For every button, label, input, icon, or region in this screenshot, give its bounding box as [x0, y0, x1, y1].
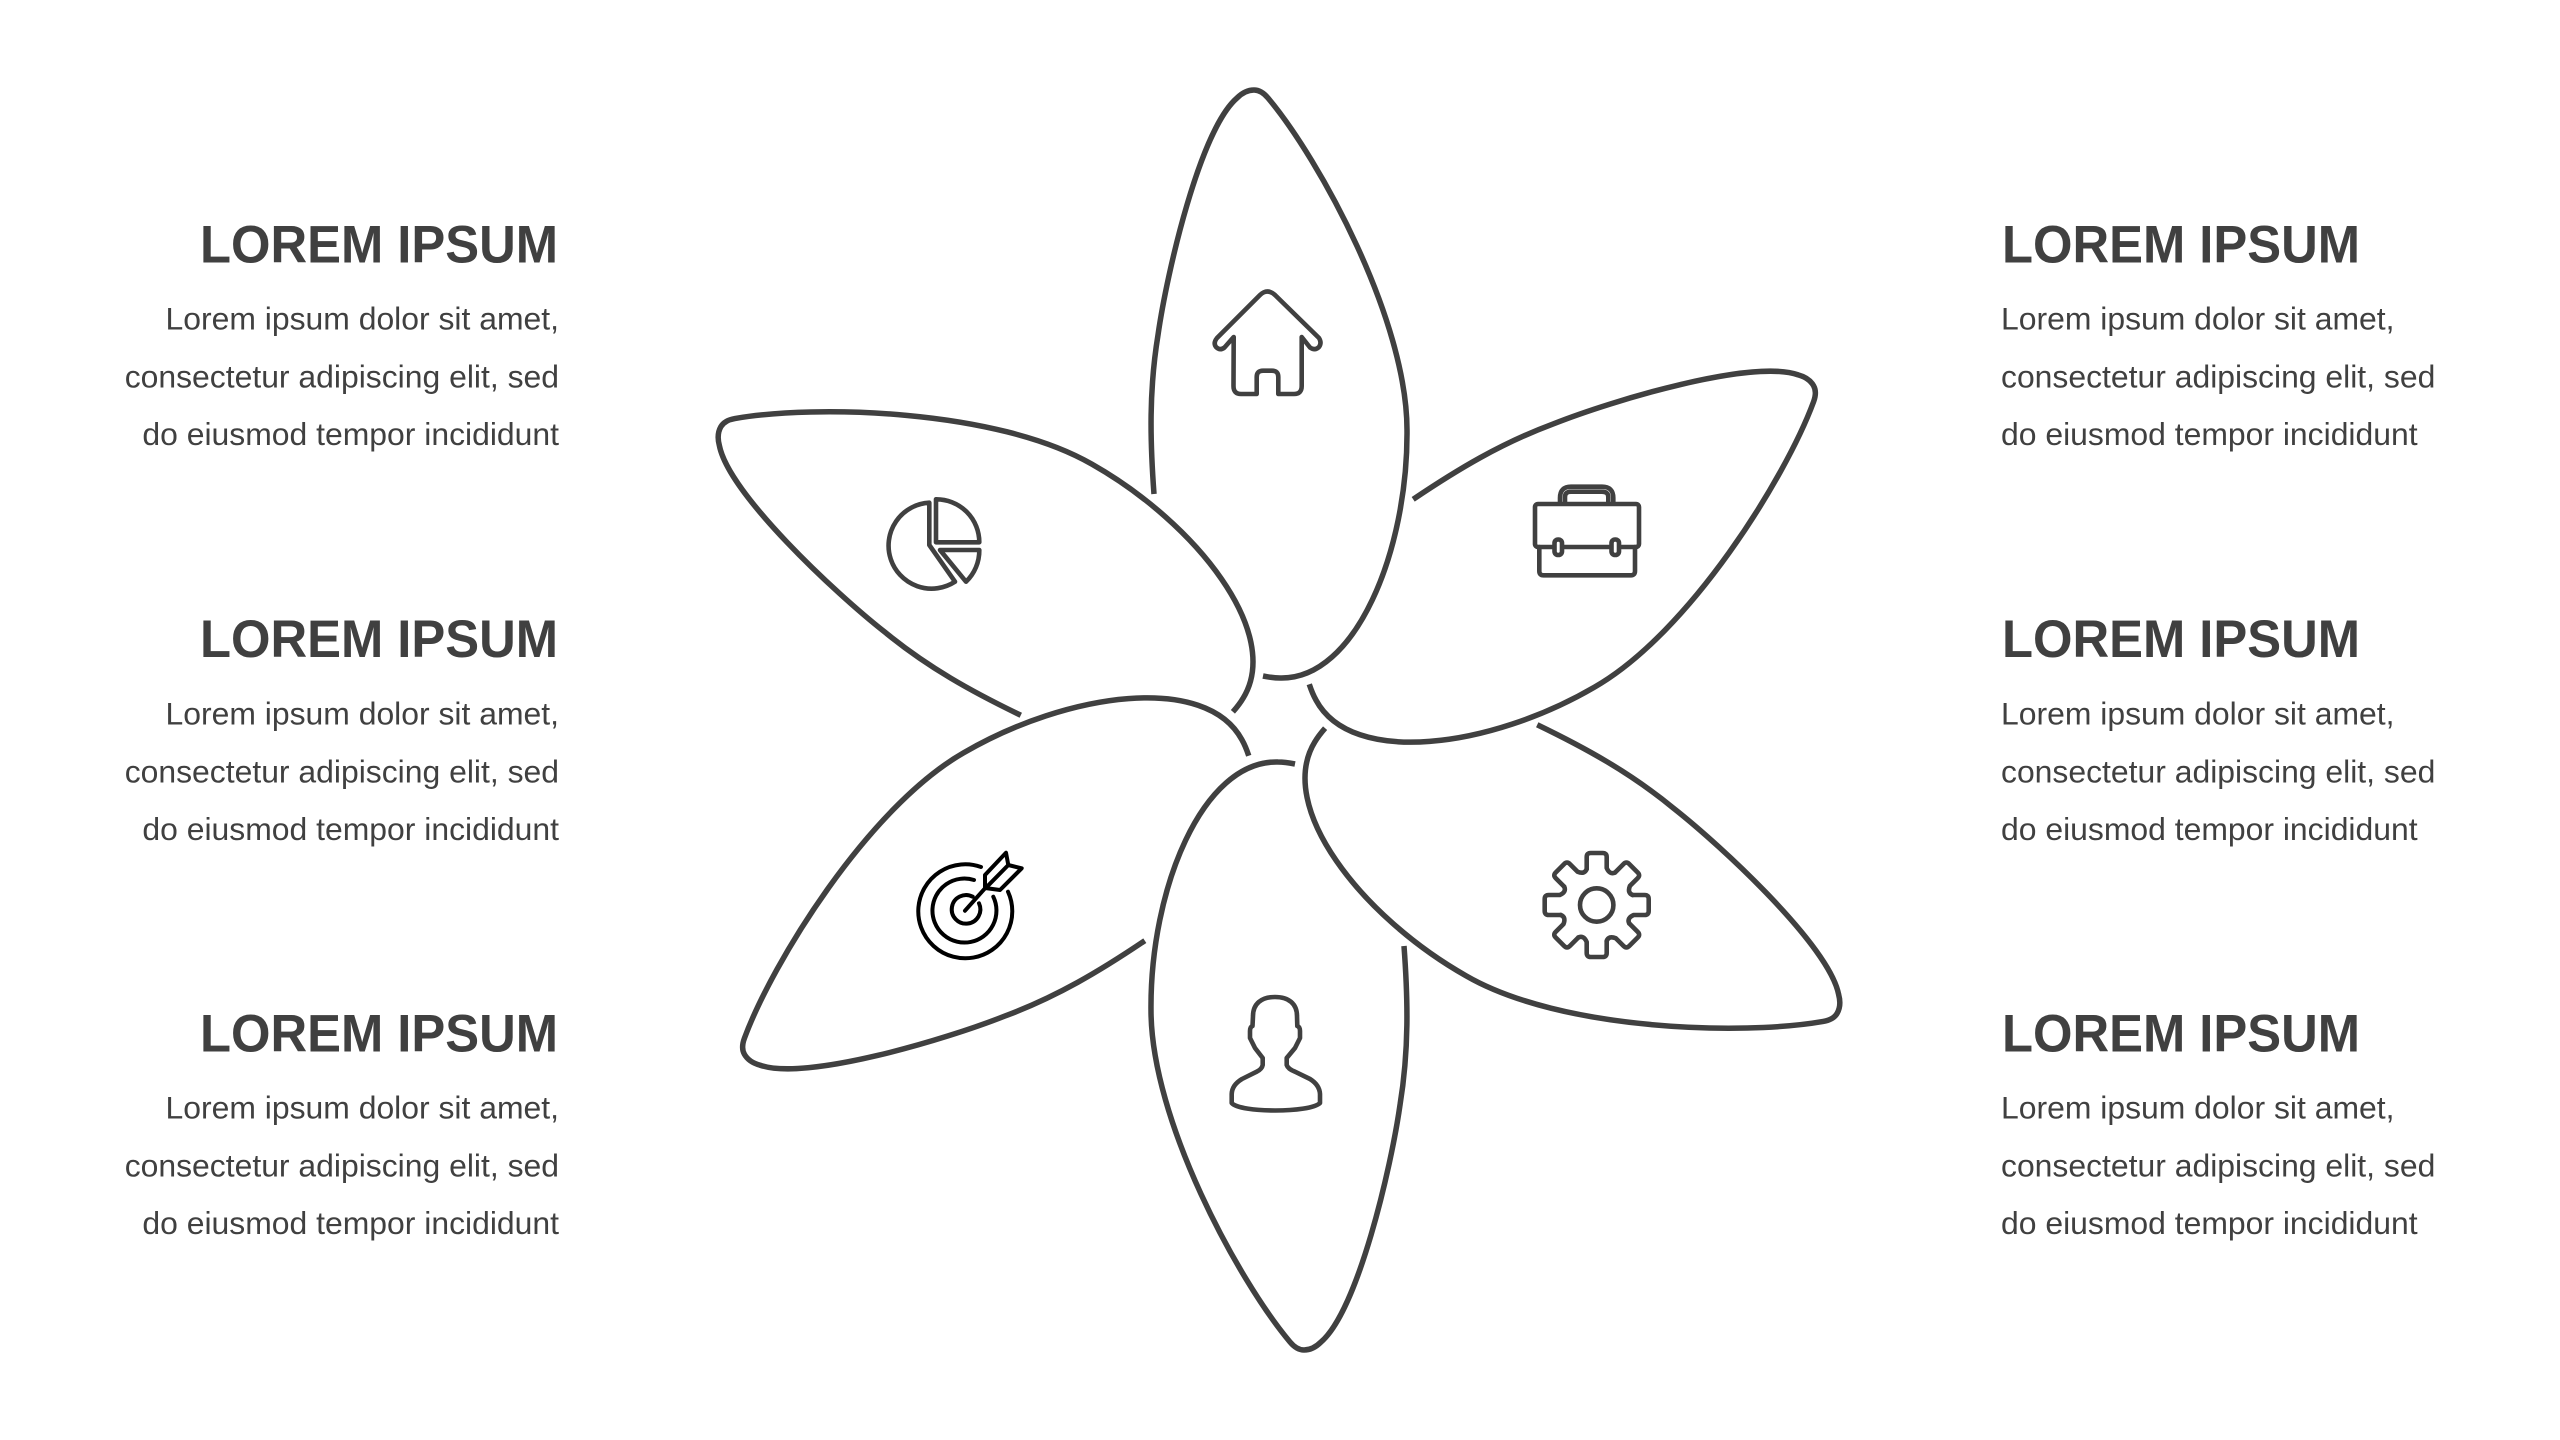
icon: person	[1232, 997, 1320, 1110]
icon: pie chart	[889, 499, 979, 589]
text block: left 3	[125, 1004, 559, 1241]
flower diagram	[669, 90, 1889, 1350]
petal: upper left	[669, 294, 1307, 810]
icon: gear	[1545, 853, 1649, 957]
petal: top	[1151, 90, 1407, 678]
text block: right 3: Lorem ipsum dolor sit amet,	[2001, 1090, 2394, 1126]
text block: right 2: do eiusmod tempor incididunt	[2001, 811, 2418, 847]
petal: lower right	[1251, 630, 1889, 1146]
icon: briefcase	[1535, 487, 1639, 575]
text block: right 3	[2001, 1004, 2435, 1241]
text block: left 2: Lorem ipsum dolor sit amet,	[166, 696, 559, 732]
text block: right 1: consectetur adipiscing elit, sed	[2001, 358, 2435, 394]
text block: left 1: LOREM IPSUM	[200, 216, 558, 274]
petal: lower left	[669, 630, 1306, 1144]
text block: right 1: Lorem ipsum dolor sit amet,	[2001, 300, 2394, 336]
text block: left 3: consectetur adipiscing elit, sed	[125, 1148, 559, 1184]
text block: right 3: do eiusmod tempor incididunt	[2001, 1205, 2418, 1241]
text block: left 2: consectetur adipiscing elit, sed	[125, 754, 559, 790]
text block: right 3: LOREM IPSUM	[2002, 1004, 2360, 1064]
text block: right 1: do eiusmod tempor incididunt	[2001, 416, 2418, 452]
text block: left 2: do eiusmod tempor incididunt	[142, 811, 559, 847]
icon: target with arrow	[918, 853, 1022, 958]
text block: left 3: Lorem ipsum dolor sit amet,	[166, 1090, 559, 1126]
text block: left 3: do eiusmod tempor incididunt	[142, 1205, 559, 1241]
text block: left 1: do eiusmod tempor incididunt	[142, 416, 559, 452]
text block: right 2: LOREM IPSUM	[2002, 610, 2360, 669]
text block: right 3: consectetur adipiscing elit, sed	[2001, 1148, 2435, 1184]
petal: bottom	[1151, 762, 1407, 1350]
text block: left 3: LOREM IPSUM	[200, 1004, 558, 1064]
text block: right 1	[2001, 216, 2435, 452]
text block: right 2	[2001, 610, 2435, 847]
petal: upper right	[1252, 296, 1889, 810]
text block: right 1: LOREM IPSUM	[2002, 216, 2360, 274]
icon: house	[1215, 292, 1320, 394]
text block: left 1	[125, 216, 559, 452]
text block: left 1: Lorem ipsum dolor sit amet,	[166, 300, 559, 336]
text block: left 2: LOREM IPSUM	[200, 610, 558, 669]
text block: right 2: consectetur adipiscing elit, sed	[2001, 754, 2435, 790]
text block: right 2: Lorem ipsum dolor sit amet,	[2001, 696, 2394, 732]
text block: left 1: consectetur adipiscing elit, sed	[125, 358, 559, 394]
text block: left 2	[125, 610, 559, 847]
